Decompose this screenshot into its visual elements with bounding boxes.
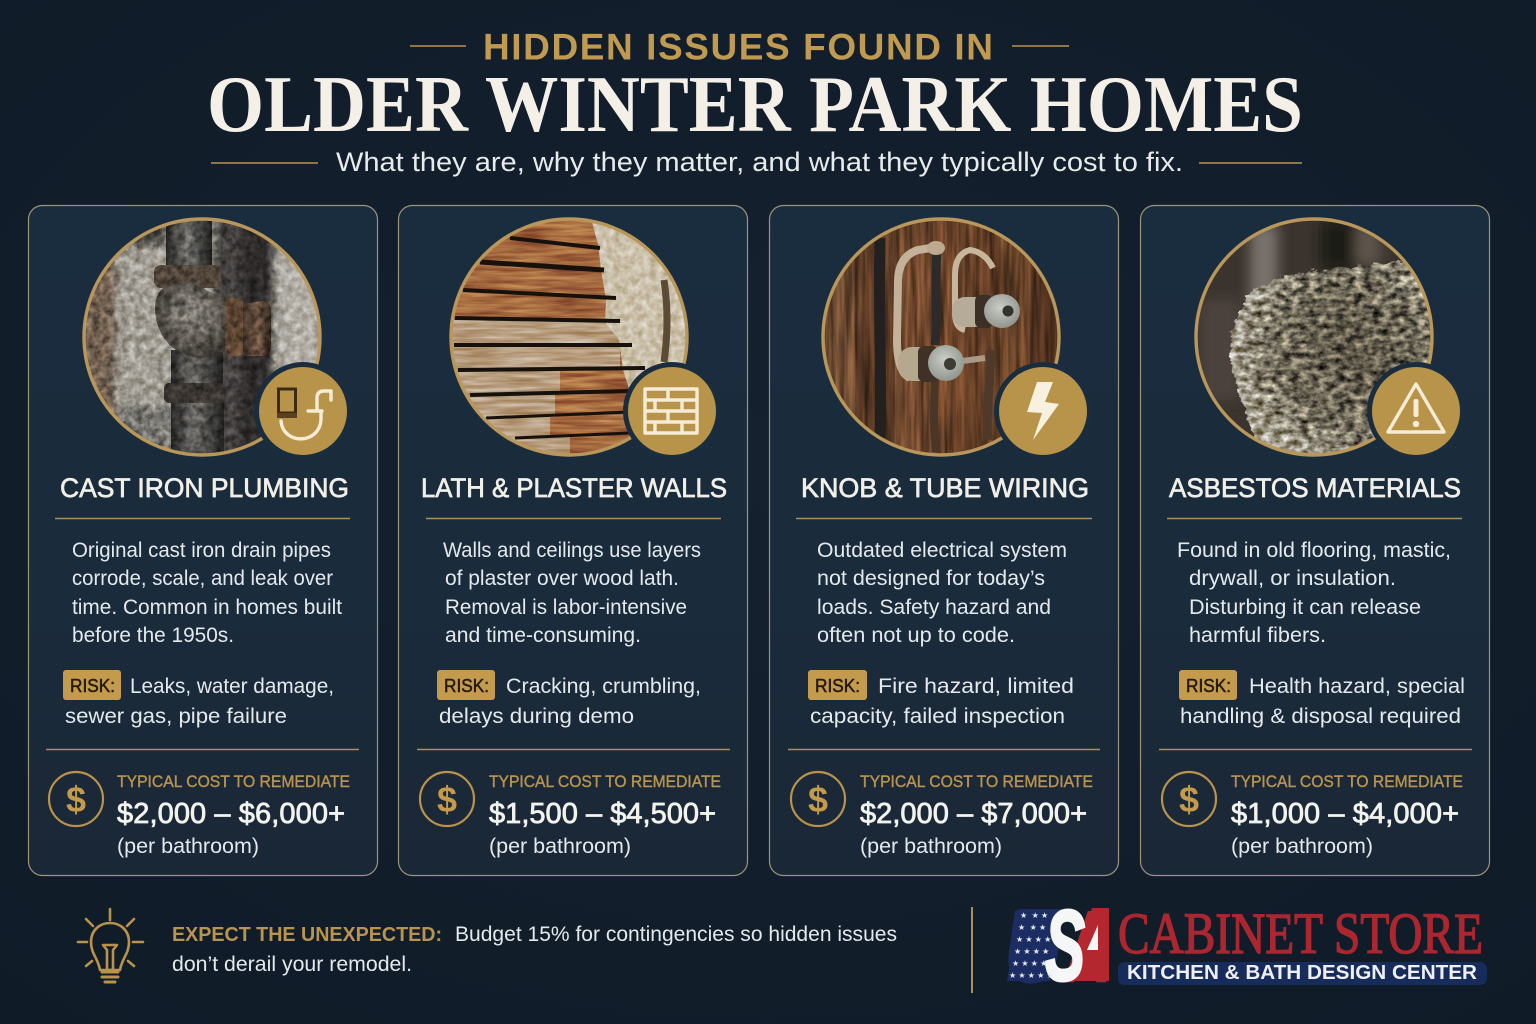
callout: contingency budget: EXPECT THE UNEXPECTED: <box>172 924 442 946</box>
cost block: TYPICAL COST TO REMEDIATE <box>117 773 350 791</box>
risk note <box>1179 670 1465 728</box>
risk note: RISK: <box>1186 676 1231 696</box>
risk note: sewer gas, pipe failure <box>65 705 287 728</box>
callout: contingency budget: don’t derail your remodel. <box>172 953 412 976</box>
heading: CAST IRON PLUMBING <box>60 473 349 503</box>
logo mark: USA: ★ ★ ★ ★ <box>1012 959 1047 968</box>
logo mark: USA: ★ ★ ★ ★ <box>1016 935 1051 944</box>
description: Walls and ceilings use layers <box>443 539 701 562</box>
photo: corroded cast iron pipe <box>82 217 322 457</box>
risk note: RISK: <box>70 676 115 696</box>
description: harmful fibers. <box>1189 624 1326 647</box>
description: drywall, or insulation. <box>1189 567 1396 590</box>
description <box>72 539 342 647</box>
description <box>817 539 1067 647</box>
risk note: Cracking, crumbling, <box>506 675 701 698</box>
photo: fibrous asbestos insulation <box>1190 215 1440 465</box>
logo mark: USA <box>1005 890 1110 1003</box>
cost block: $2,000 – $7,000+ <box>860 798 1087 830</box>
cost block: (per bathroom) <box>1231 835 1373 858</box>
panel: asbestos materials <box>1140 206 1490 876</box>
tagline banner: KITCHEN & BATH DESIGN CENTER <box>1127 961 1477 984</box>
panel: knob and tube wiring <box>770 206 1118 876</box>
description: not designed for today’s <box>817 567 1045 590</box>
panel: cast iron plumbing <box>28 205 378 876</box>
cost block <box>791 772 1093 858</box>
description: Disturbing it can release <box>1189 596 1421 619</box>
risk note: Leaks, water damage, <box>130 675 334 698</box>
description: time. Common in homes built <box>72 596 342 619</box>
logo mark: USA: ★ ★ ★ ★ <box>1014 947 1049 956</box>
icon: lightning bolt <box>994 362 1092 460</box>
icon: light bulb <box>78 909 143 982</box>
risk note <box>808 670 1074 728</box>
description: loads. Safety hazard and <box>817 596 1051 619</box>
risk note: handling & disposal required <box>1180 705 1461 728</box>
heading: LATH & PLASTER WALLS <box>421 473 727 503</box>
lower insulator <box>898 345 964 382</box>
logo mark: USA: ★ ★ ★ <box>1018 923 1046 932</box>
description: Outdated electrical system <box>817 539 1067 562</box>
description: of plaster over wood lath. <box>445 567 679 590</box>
cost block: TYPICAL COST TO REMEDIATE <box>1231 773 1463 791</box>
description: Removal is labor-intensive <box>445 596 687 619</box>
risk note: RISK: <box>444 676 489 696</box>
logo mark: USA: ★ ★ ★ ★ ★ <box>1009 971 1054 980</box>
cost block: (per bathroom) <box>860 835 1002 858</box>
cost block: $1,500 – $4,500+ <box>489 798 716 830</box>
logo mark: USA: ★ ★ ★ <box>1020 911 1048 920</box>
risk note: Fire hazard, limited <box>878 675 1074 698</box>
risk note: Health hazard, special <box>1249 675 1465 698</box>
cost block: $ <box>1179 779 1199 820</box>
cost block: TYPICAL COST TO REMEDIATE <box>860 773 1093 791</box>
logo mark: USA: S <box>1045 890 1085 1002</box>
title: OLDER WINTER PARK HOMES <box>207 61 1303 149</box>
risk note <box>63 670 334 728</box>
eyebrow heading: HIDDEN ISSUES FOUND IN <box>483 26 993 68</box>
description <box>443 539 701 647</box>
cost block: TYPICAL COST TO REMEDIATE <box>489 773 721 791</box>
cost block: (per bathroom) <box>489 835 631 858</box>
description <box>1177 539 1451 647</box>
heading: ASBESTOS MATERIALS <box>1169 473 1461 503</box>
cost block: $1,000 – $4,000+ <box>1231 798 1459 830</box>
description: corrode, scale, and leak over <box>72 567 333 590</box>
cost block <box>420 772 721 858</box>
heading: KNOB & TUBE WIRING <box>801 473 1089 503</box>
photo: exposed wood lath and plaster <box>445 215 695 460</box>
risk note: delays during demo <box>439 705 634 728</box>
icon: warning triangle <box>1367 362 1465 460</box>
cost block <box>49 772 350 858</box>
cost block: $2,000 – $6,000+ <box>117 798 345 830</box>
cost block: $ <box>66 779 86 820</box>
description: before the 1950s. <box>72 624 234 647</box>
upper insulator <box>952 294 1020 328</box>
cost block <box>1162 772 1463 858</box>
callout: contingency budget: Budget 15% for contingencies so hidden issues <box>455 923 897 946</box>
icon: brick wall <box>623 362 721 460</box>
header <box>207 26 1303 177</box>
panel: lath and plaster walls <box>398 206 748 876</box>
callout: contingency budget <box>172 923 897 976</box>
icon: plumbing trap <box>254 362 352 460</box>
description: Found in old flooring, mastic, <box>1177 539 1451 562</box>
photo: knob and tube wiring on wood <box>820 215 1065 460</box>
description: and time-consuming. <box>445 624 641 647</box>
subtitle: What they are, why they matter, and what they typically cost to fix. <box>336 147 1183 177</box>
risk note: capacity, failed inspection <box>810 705 1065 728</box>
description: often not up to code. <box>817 624 1015 647</box>
description: Original cast iron drain pipes <box>72 539 331 562</box>
cost block: $ <box>437 779 457 820</box>
risk note <box>437 670 701 728</box>
cost block: (per bathroom) <box>117 835 259 858</box>
logo mark: USA: A <box>1064 891 1110 1003</box>
cost block: $ <box>808 779 828 820</box>
logo mark: USA: U <box>1005 891 1063 1003</box>
logo: USA Cabinet Store <box>1005 890 1487 1003</box>
risk note: RISK: <box>815 676 860 696</box>
